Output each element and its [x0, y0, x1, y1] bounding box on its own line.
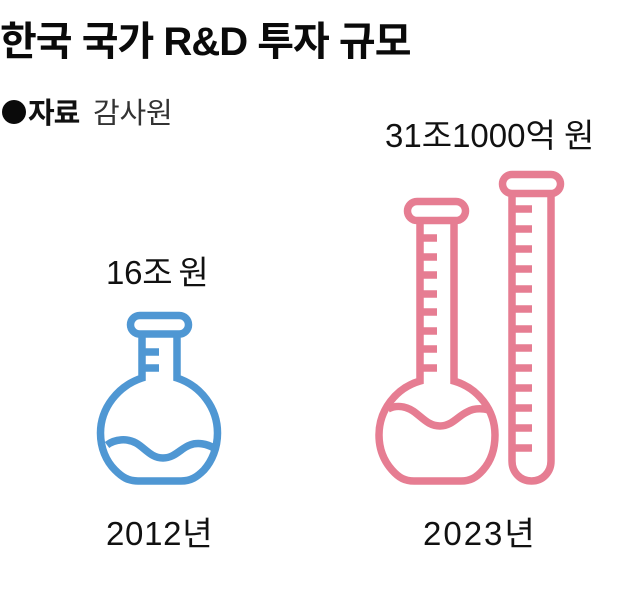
source label: 자료	[28, 98, 79, 130]
year label: 2012: 2012년	[106, 515, 213, 552]
value label: 2012: 16조 원	[106, 254, 209, 291]
bullet	[2, 100, 26, 124]
icon: blue round flask 2012	[100, 316, 218, 481]
year label: 2023: 2023년	[423, 515, 537, 552]
source name: 감사원	[93, 98, 172, 130]
value label: 2023: 31조1000억 원	[385, 117, 594, 154]
icon: pink test tube 2023	[502, 174, 560, 481]
title: 한국 국가 R&D 투자 규모	[0, 20, 411, 64]
icon: pink tall flask 2023	[379, 202, 495, 481]
source note	[2, 98, 172, 130]
